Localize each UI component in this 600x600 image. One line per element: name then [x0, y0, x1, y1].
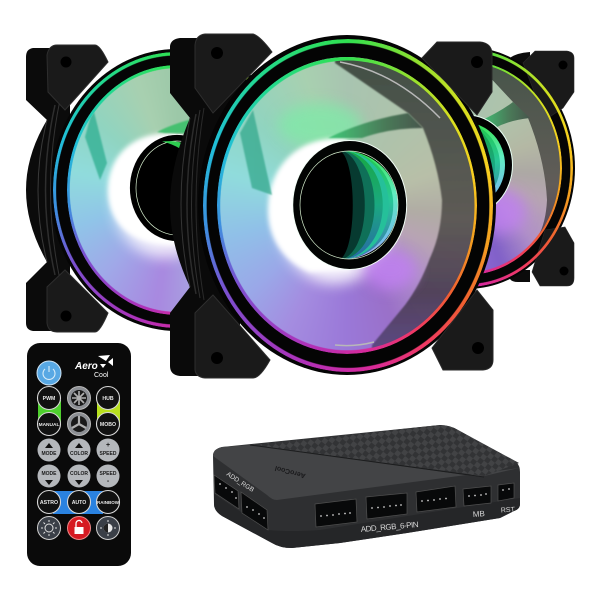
- hub rim: [292, 140, 407, 270]
- fan: rear right: [468, 50, 575, 288]
- corner: top right: [422, 42, 492, 115]
- left fan soft glow: [105, 188, 180, 266]
- power button: [37, 361, 61, 385]
- grey button labels: SPEED: [100, 451, 117, 457]
- right fan outer LED ring: [478, 52, 573, 286]
- grey button labels: MODE: [42, 451, 57, 457]
- dark button labels: MOBO: [100, 422, 116, 428]
- infinity mirror: [338, 151, 398, 259]
- brand logo: Cool: [94, 372, 109, 379]
- ports: [214, 475, 514, 530]
- brand logo: [74, 355, 113, 379]
- right fan green blade: [485, 102, 530, 127]
- left fan blade disc: [70, 68, 190, 312]
- brightness button: [38, 516, 60, 540]
- corner: bottom left: [195, 295, 270, 378]
- left fan teal blade: [85, 108, 107, 180]
- green blade: [328, 113, 423, 138]
- dark button labels: AUTO: [72, 500, 86, 506]
- front fan frame: [170, 34, 496, 378]
- grey button labels: SPEED: [100, 471, 117, 477]
- RGB controller hub: [213, 425, 520, 548]
- lock button: [68, 516, 90, 540]
- dark button labels: ASTRO: [40, 500, 58, 506]
- front fan blade disc: [220, 57, 474, 350]
- remote body: [27, 343, 131, 566]
- grey button labels: +: [106, 442, 110, 449]
- front fan blades and hub: [240, 60, 474, 348]
- dark button labels: [39, 396, 120, 506]
- white crescent: [268, 138, 350, 272]
- fan mode buttons: [68, 386, 90, 436]
- right fan dark rim: [492, 67, 560, 262]
- lower lip: [214, 494, 520, 548]
- dark button labels: PWM: [43, 396, 55, 402]
- right fan blade disc: [468, 68, 560, 270]
- grey buttons: [38, 438, 120, 488]
- soft white glow: [274, 242, 394, 293]
- grey button labels: MODE: [42, 471, 57, 477]
- contrast button: [96, 516, 120, 540]
- right fan frame: [476, 50, 575, 288]
- hub top surface: [213, 445, 519, 500]
- remote control: [27, 343, 131, 566]
- port labels: [225, 471, 516, 534]
- port labels: ADD_RGB: [225, 471, 255, 494]
- right fan blades and hub: [474, 67, 560, 262]
- port pins: [219, 483, 510, 519]
- brand logo: Aero: [74, 361, 98, 372]
- left fan blades and hub: [84, 112, 190, 266]
- port labels: ADD_RGB_6-PIN: [360, 520, 419, 534]
- corner: top left: [195, 34, 272, 113]
- hub body: [213, 425, 520, 548]
- grey button labels: COLOR: [70, 451, 88, 457]
- grey button labels: [42, 442, 117, 485]
- left fan inner LED ring: [67, 65, 171, 315]
- hub logo: AeroCool: [274, 464, 307, 479]
- green glow above hub: [278, 103, 362, 147]
- left fan white crescent: [108, 134, 180, 245]
- dark buttons: [38, 386, 120, 514]
- silver rim highlights: [335, 62, 440, 346]
- grey button labels: COLOR: [70, 471, 88, 477]
- purple glow: [364, 250, 416, 290]
- front fan outer LED ring: [203, 39, 493, 372]
- left fan green blade: [157, 119, 190, 134]
- left fan frame: [26, 44, 251, 332]
- dark button labels: HUB: [102, 396, 114, 402]
- front fan inner LED ring: [217, 57, 477, 354]
- right fan inner LED ring: [483, 65, 562, 274]
- right fan purple glow: [493, 186, 530, 239]
- grey button labels: -: [107, 478, 110, 485]
- dark button labels: RAINBOW: [97, 500, 120, 505]
- port labels: MB: [473, 509, 485, 519]
- colour bands: [38, 400, 120, 514]
- left fan outer LED ring: [53, 52, 248, 328]
- teal blade: [240, 110, 272, 195]
- panel edge: [250, 445, 484, 477]
- front fan dark rim: [335, 55, 480, 352]
- port labels: RST: [501, 506, 516, 514]
- right fan hub: [422, 115, 512, 215]
- fan: rear left: [26, 44, 251, 332]
- left fan hub: [130, 134, 224, 242]
- grey button arrows: [45, 443, 83, 485]
- fan: front centre: [170, 34, 496, 378]
- dark button labels: MANUAL: [39, 422, 59, 428]
- carbon fibre panel: [250, 425, 519, 476]
- corner: bottom right: [432, 290, 493, 370]
